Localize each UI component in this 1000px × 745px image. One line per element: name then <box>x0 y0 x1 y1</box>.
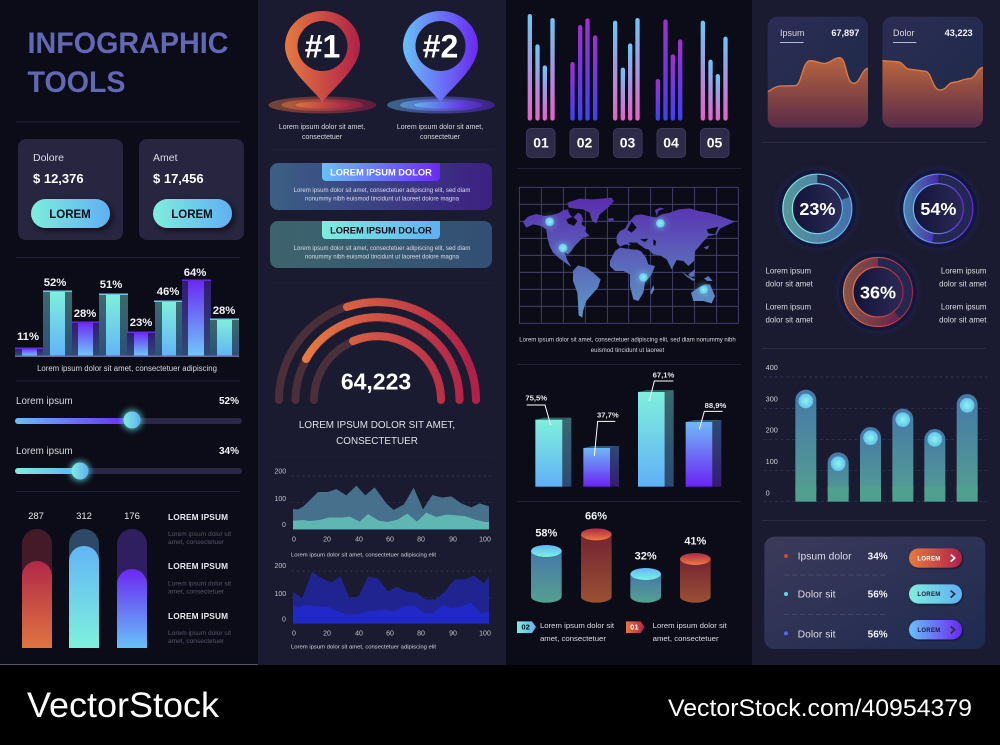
area chart: blue: 90 <box>449 630 457 638</box>
panel: list with action buttons <box>764 537 985 649</box>
number tiles 01 to 05: 02 <box>577 134 592 150</box>
cylinder legend: Lorem ipsum dolor sit <box>653 621 728 630</box>
bar chart: percent columns: 23% <box>130 317 152 329</box>
panel: list with action buttons: 56% <box>868 590 888 601</box>
panel: money card Dolore: Dolore <box>33 152 64 164</box>
legend text for pillars: Lorem ipsum dolor sit <box>168 580 231 588</box>
chart: three rounded pillars: 287 <box>28 511 44 522</box>
donut side labels: Lorem ipsum <box>766 302 812 312</box>
panel: money card Dolore <box>18 139 123 240</box>
banner: violet text block: nonummy nibh euismod tincidunt ut laoreet dolore magna <box>305 196 460 202</box>
number tiles 01 to 05: 01 <box>533 134 549 150</box>
chart: cylinders: 66% <box>585 510 607 522</box>
gauge caption: LOREM IPSUM DOLOR SIT AMET, <box>299 420 455 431</box>
area chart: teal: 60 <box>386 536 394 544</box>
gauge value: 64,223 <box>341 368 411 394</box>
footer image id text: VectorStock.com/40954379 <box>668 695 972 722</box>
bar chart: percent columns <box>15 267 239 357</box>
slider 34 percent: 34% <box>219 446 239 457</box>
area chart: teal: 90 <box>449 536 457 544</box>
area chart: blue: 100 <box>479 630 491 638</box>
footer brand text: VectorStock <box>27 685 219 725</box>
legend text for pillars: amet, consectetuer <box>168 539 225 546</box>
slider 52 percent: 52% <box>219 396 239 407</box>
world map with grid <box>519 187 738 323</box>
legend text for pillars: Lorem ipsum dolor sit <box>168 531 231 538</box>
slider 52 percent: Lorem ipsum <box>16 396 73 407</box>
panel: Dolor area card: Dolor <box>893 28 914 38</box>
banner: teal text block: nonummy nibh euismod tincidunt ut laoreet dolore magna <box>305 254 460 260</box>
banner: teal text block: LOREM IPSUM DOLOR <box>330 226 432 236</box>
panel: money card Amet <box>139 139 244 240</box>
panel: column one background <box>0 0 258 665</box>
chart: triple arc gauge <box>279 302 476 400</box>
chart: rounded column chart with dots: 200 <box>766 426 778 435</box>
area chart: blue: 0 <box>282 616 286 624</box>
area chart: blue <box>274 563 491 650</box>
area chart: teal: 40 <box>355 536 363 544</box>
banner: violet text block: LOREM IPSUM DOLOR <box>330 168 432 178</box>
banner: teal text block: Lorem ipsum dolor sit amet, consectetuer adipiscing elit, sed diam <box>294 246 470 252</box>
area chart: blue: 100 <box>274 591 286 598</box>
panel: money card Amet: LOREM <box>171 209 213 221</box>
legend text for pillars: Lorem ipsum dolor sit <box>168 630 231 637</box>
area chart: teal: 0 <box>292 536 296 544</box>
legend text for pillars: LOREM IPSUM <box>168 512 228 522</box>
donut side labels: Lorem ipsum <box>941 302 987 312</box>
area chart: blue: Lorem ipsum dolor sit amet, consectetuer adipiscing elit <box>291 644 436 650</box>
panel: list with action buttons: Dolor sit <box>798 590 836 601</box>
bar chart: percent columns: 52% <box>44 277 66 289</box>
map caption: euismod tincidunt ut laoreet <box>591 348 665 354</box>
pin captions: consectetuer <box>420 134 461 141</box>
donut side labels: dolor sit amet <box>939 316 987 324</box>
panel: money card Dolore: $ 12,376 <box>33 171 84 186</box>
panel: list with action buttons: LOREM <box>917 628 941 634</box>
chart: rounded column chart with dots <box>764 363 987 502</box>
donut: 36 percent: 36% <box>860 282 896 302</box>
number tiles 01 to 05: 05 <box>707 134 722 150</box>
footer band <box>0 665 1000 745</box>
panel: money card Amet: $ 17,456 <box>153 171 204 186</box>
banner: violet text block <box>270 163 492 210</box>
donut: 23 percent <box>777 168 858 249</box>
pin captions: consectetuer <box>302 134 343 141</box>
donut side labels <box>766 266 987 324</box>
legend text for pillars: amet, consectetuer <box>168 588 225 596</box>
chart: 3D bars with leaders: 88,9% <box>705 401 727 410</box>
icon: location pin two <box>387 11 495 114</box>
cylinder legend: 02 <box>521 623 530 632</box>
legend text for pillars: amet, consectetuer <box>168 638 225 645</box>
chart: grouped thin bars <box>528 14 728 121</box>
bar chart: percent columns: 28% <box>213 305 235 317</box>
cylinder legend: Lorem ipsum dolor sit <box>540 621 615 630</box>
chart: 3D bars with leaders: 75,5% <box>525 394 547 403</box>
chart: cylinders: 32% <box>635 550 657 562</box>
donut: 54 percent: 54% <box>920 199 956 219</box>
panel: column four background <box>752 0 1000 665</box>
pin captions: Lorem ipsum dolor sit amet, <box>397 124 483 131</box>
bar chart: percent columns: 46% <box>157 286 179 298</box>
chart: rounded column chart with dots: 400 <box>766 363 778 372</box>
area chart: teal: Lorem ipsum dolor sit amet, consectetuer adipiscing elit <box>291 552 436 558</box>
panel: Ipsum area card <box>768 17 868 128</box>
legend text for pillars <box>168 512 231 645</box>
panel: Dolor area card: 43,223 <box>945 28 973 38</box>
bar chart: percent columns: 11% <box>17 331 39 343</box>
cylinder legend: amet, consectetuer <box>653 634 719 643</box>
area chart: blue: 20 <box>323 630 331 638</box>
title: TOOLS <box>28 66 126 99</box>
number tiles 01 to 05: 03 <box>620 134 635 150</box>
panel: money card Dolore: LOREM <box>49 209 91 221</box>
legend text for pillars: LOREM IPSUM <box>168 611 228 621</box>
pin captions: Lorem ipsum dolor sit amet, <box>279 124 365 131</box>
area chart: teal: 20 <box>323 536 331 544</box>
chart: 3D bars with leaders <box>525 370 727 487</box>
slider 52 percent <box>15 396 242 430</box>
panel: column two background <box>258 0 506 665</box>
donut: 54 percent <box>898 168 979 249</box>
donut side labels: Lorem ipsum <box>941 266 987 276</box>
chart: 3D bars with leaders: 67,1% <box>653 370 675 379</box>
area chart: teal: 100 <box>274 496 286 503</box>
panel: list with action buttons: LOREM <box>917 592 941 598</box>
bar chart: percent columns: 28% <box>74 308 96 320</box>
panel: money card Amet: Amet <box>153 152 178 164</box>
panel: list with action buttons: Ipsum dolor <box>798 552 852 563</box>
donut side labels: dolor sit amet <box>766 316 814 324</box>
donut side labels: dolor sit amet <box>766 280 814 288</box>
title: INFOGRAPHIC <box>28 27 228 60</box>
chart: rounded column chart with dots: 300 <box>766 394 778 403</box>
panel: list with action buttons: Dolor sit <box>798 629 836 640</box>
cylinder legend: 01 <box>630 623 639 632</box>
chart: three rounded pillars: 312 <box>76 511 92 522</box>
area chart: teal <box>274 468 491 558</box>
chart: three rounded pillars <box>22 511 147 648</box>
donut side labels: dolor sit amet <box>939 280 987 288</box>
cylinder legend <box>517 621 728 643</box>
area chart: teal: 100 <box>479 536 491 544</box>
title <box>28 27 228 99</box>
chart: 3D bars with leaders: 37,7% <box>597 410 619 419</box>
map caption <box>519 338 736 354</box>
icon: location pin one <box>268 11 376 114</box>
area chart: teal: 200 <box>274 468 286 476</box>
chart: cylinders <box>531 510 711 603</box>
slider 34 percent <box>15 446 242 482</box>
area chart: blue: 0 <box>292 630 296 638</box>
icon: location pin one: #1 <box>305 28 340 64</box>
area chart: blue: 200 <box>274 563 286 570</box>
pin captions <box>279 124 483 141</box>
panel: list with action buttons: LOREM <box>917 556 941 562</box>
area chart: teal: 80 <box>417 536 425 544</box>
banner: teal text block <box>270 221 492 268</box>
gauge caption: CONSECTETUER <box>336 436 418 447</box>
area chart: teal: 0 <box>282 522 286 529</box>
chart: rounded column chart with dots: 100 <box>766 457 778 466</box>
donut: 36 percent <box>837 251 919 333</box>
cylinder legend: amet, consectetuer <box>540 634 606 643</box>
chart: rounded column chart with dots: 0 <box>766 489 770 498</box>
panel: Ipsum area card: Ipsum <box>780 28 804 38</box>
panel: list with action buttons: 34% <box>868 552 888 563</box>
panel: list with action buttons: 56% <box>868 629 888 640</box>
panel: column three background <box>506 0 752 665</box>
map caption: Lorem ipsum dolor sit amet, consectetuer adipiscing elit, sed diam nonummy nibh <box>519 338 736 344</box>
legend text for pillars: LOREM IPSUM <box>168 561 228 571</box>
chart: cylinders: 58% <box>535 528 558 540</box>
area chart: blue: 80 <box>417 630 425 638</box>
donut: 23 percent: 23% <box>799 199 835 219</box>
slider 34 percent: Lorem ipsum <box>16 446 73 457</box>
bar chart: percent columns: 51% <box>100 279 122 291</box>
area chart: blue: 40 <box>355 630 363 638</box>
area chart: blue: 60 <box>386 630 394 638</box>
chart: three rounded pillars: 176 <box>124 511 140 522</box>
panel: Dolor area card <box>882 17 983 128</box>
banner: violet text block: Lorem ipsum dolor sit amet, consectetuer adipiscing elit, sed diam <box>294 188 470 194</box>
number tiles 01 to 05 <box>526 128 729 158</box>
bar chart: percent columns: 64% <box>184 267 206 279</box>
chart: cylinders: 41% <box>684 535 707 547</box>
chart caption: Lorem ipsum dolor sit amet, consectetuer adipiscing <box>37 364 217 373</box>
number tiles 01 to 05: 04 <box>663 134 679 150</box>
gauge caption <box>299 420 455 447</box>
panel: Ipsum area card: 67,897 <box>831 28 859 38</box>
donut side labels: Lorem ipsum <box>766 266 812 276</box>
icon: location pin two: #2 <box>423 28 458 64</box>
